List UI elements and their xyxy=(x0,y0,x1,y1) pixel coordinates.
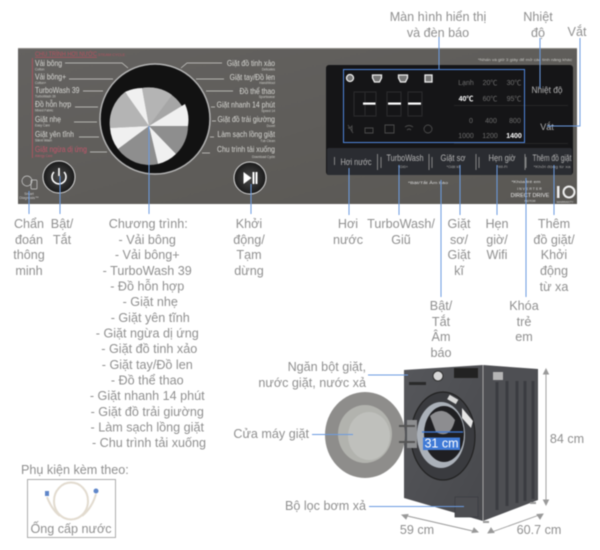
button row xyxy=(334,153,572,170)
label: smart diagnosis: minh xyxy=(15,264,43,278)
label: sound toggle: Âm xyxy=(432,329,450,344)
dimension: depth: 60.7 cm xyxy=(517,523,561,537)
open door xyxy=(325,392,405,478)
label: program list: - Giặt tay/Đồ len xyxy=(102,358,193,372)
label: sound toggle: Tắt xyxy=(432,314,451,329)
label: power: Tắt xyxy=(53,232,72,247)
drum opening xyxy=(411,392,475,480)
program list right: Hand/Wool xyxy=(259,81,275,85)
temperature label: Nhiệt độ xyxy=(532,85,562,95)
spin options: 1000 xyxy=(458,133,474,140)
label: start pause: dừng xyxy=(234,264,264,278)
washing machine xyxy=(325,365,538,522)
program list left: Easy Care xyxy=(35,123,50,128)
callout: door xyxy=(233,427,353,441)
label: start pause: động/ xyxy=(233,233,265,247)
button row: *Wi-Fi xyxy=(497,164,508,169)
button row: Hẹn giờ xyxy=(488,153,516,163)
label: smart diagnosis: thông xyxy=(13,248,45,262)
icons row top xyxy=(346,74,432,82)
label: sound toggle: báo xyxy=(430,346,452,360)
button row: *Giặt kĩ xyxy=(446,164,460,169)
dimension: width xyxy=(400,514,478,537)
program list left: TurboWash 39 xyxy=(35,94,56,99)
callout: detergent drawer: Ngăn bột giặt, xyxy=(288,360,366,374)
program list left: STEAM CYCLE xyxy=(98,53,126,57)
icon: start pause button xyxy=(234,162,266,194)
label: program list: - Giặt yên tĩnh xyxy=(111,311,190,325)
label: add garment: Thêm xyxy=(538,217,570,231)
temperature options: 20℃ xyxy=(483,79,497,87)
label: program list: - Giặt đồ trải giường xyxy=(91,405,204,419)
label: steam: Hơi xyxy=(338,217,358,231)
label: program list: - Giặt ngừa dị ứng xyxy=(96,326,199,340)
label: child lock: Khóa xyxy=(509,299,539,313)
dimension: height xyxy=(544,369,584,505)
front of machine xyxy=(404,365,483,521)
inverter direct drive badge xyxy=(511,187,550,203)
spin options: 1200 xyxy=(482,133,498,140)
label: child lock: em xyxy=(515,330,533,344)
label: program list: - Đồ hỗn hợp xyxy=(110,278,184,294)
button row: *Khởi động từ xa xyxy=(534,164,571,169)
label: timer wifi: giờ/ xyxy=(486,233,508,247)
spin options: 0 xyxy=(469,118,473,125)
callout lines panel xyxy=(29,37,580,297)
label: program list: - Giặt đồ tinh xảo xyxy=(101,342,197,356)
label: sound toggle: Bật/ xyxy=(430,299,453,313)
label: start pause: Khởi xyxy=(236,217,262,231)
program list right: Giặt đồ tinh xảo xyxy=(227,58,275,68)
child lock note: *Khóa trẻ em xyxy=(512,179,541,184)
control panel xyxy=(18,48,577,204)
spin options: 400 xyxy=(485,118,497,125)
program list left: Cotton xyxy=(35,67,44,72)
program list right xyxy=(181,58,276,159)
program list left: CHU TRÌNH HƠI NƯỚC xyxy=(35,49,97,58)
spin label: Vắt xyxy=(540,122,554,132)
side of machine xyxy=(483,365,538,521)
temperature options: 95℃ xyxy=(507,95,521,103)
program list right: Speed 14 xyxy=(261,109,275,113)
program list left: Giặt yên tĩnh xyxy=(35,129,74,139)
program list right: Duvet xyxy=(267,124,275,128)
label: program list: Chương trình: xyxy=(109,217,188,231)
label: add garment: Khởi xyxy=(541,248,567,262)
dimension: height: 84 cm xyxy=(550,432,584,446)
program list right: Làm sạch lồng giặt xyxy=(217,129,276,139)
temperature options: 30℃ xyxy=(507,79,521,87)
label: power: Bật/ xyxy=(51,217,74,231)
label: program list: - Vải bông xyxy=(119,233,176,247)
program list left: Cotton+ xyxy=(35,81,46,85)
program list left xyxy=(32,49,128,158)
temperature options xyxy=(458,79,521,103)
control strip xyxy=(409,368,478,385)
label: program list: - Đồ thể thao xyxy=(111,374,184,388)
label: timer wifi: Wifi xyxy=(487,248,507,262)
heading: display and indicators: Màn hình hiển thị xyxy=(390,10,486,24)
program list left: TurboWash 39 xyxy=(35,85,79,95)
button row: Thêm đồ giặt xyxy=(532,153,572,163)
label: prewash: sơ/ xyxy=(450,233,469,247)
label: smart diagnosis: Chẩn xyxy=(14,217,44,231)
icon: power button xyxy=(43,161,75,193)
program list right: Giặt đồ trải giường xyxy=(217,114,275,124)
program list right: Giặt tay/Đồ len xyxy=(230,72,275,82)
heading: display and indicators: và đèn báo xyxy=(407,26,469,40)
label: prewash: Giặt xyxy=(447,248,471,262)
callout: pump filter: Bộ lọc bơm xả xyxy=(285,499,366,513)
program list right: Delicates xyxy=(262,67,275,72)
10 year warranty badge: WARRANTY xyxy=(556,200,574,204)
sound toggle note: *Bật/Tắt Âm báo xyxy=(408,180,449,185)
temperature options: 40℃ xyxy=(459,95,473,103)
program list left: Vải bông+ xyxy=(35,72,67,82)
display highlight frame xyxy=(344,70,524,142)
label: add garment: động xyxy=(540,264,568,278)
label: add garment: đồ giặt/ xyxy=(533,233,575,247)
program list left: Đồ hỗn hợp xyxy=(35,99,71,109)
label: turbowash: Giũ xyxy=(391,233,411,247)
icon: smart diagnosis: Smart xyxy=(24,192,34,196)
inverter direct drive badge: DIRECT DRIVE xyxy=(511,193,550,199)
button row: *Giũ+ xyxy=(398,164,409,169)
spin options xyxy=(458,118,522,140)
filter cover xyxy=(455,497,478,517)
program list right: Chu trình tải xuống xyxy=(217,144,275,154)
display panel xyxy=(326,58,573,175)
dimension: drum diameter: 31 cm xyxy=(424,436,459,450)
label: program list: - Chu trình tải xuống xyxy=(92,436,206,450)
seven segment readout xyxy=(354,92,422,116)
label: program list: - Giặt nhanh 14 phút xyxy=(90,389,205,403)
accessories box: water hose xyxy=(28,480,116,538)
callout: door: Cửa máy giặt xyxy=(233,427,310,441)
dimension: depth xyxy=(488,514,561,537)
program list right: Sportswear xyxy=(259,95,276,99)
callout: detergent drawer xyxy=(258,360,408,390)
status icons xyxy=(348,125,432,133)
callout: detergent drawer: nước giặt, nước xả xyxy=(258,376,366,390)
inverter direct drive badge: INVERTER xyxy=(517,187,543,191)
label: prewash: kĩ xyxy=(454,264,464,278)
dimension: width: 59 cm xyxy=(400,523,434,537)
icon: program dial xyxy=(100,64,210,174)
label: add garment: từ xa xyxy=(540,280,568,294)
temperature options: Lạnh xyxy=(458,80,474,87)
label: smart diagnosis: đoán xyxy=(15,233,43,247)
accessories heading: Phụ kiện kèm theo: xyxy=(21,463,129,477)
program list left: Silent Wash xyxy=(35,138,52,143)
display panel: *Nhấn và giữ 3 giây để mở các tính năng khác xyxy=(478,58,572,62)
icon: smart diagnosis xyxy=(19,176,39,200)
program list left: Mixed Fabric xyxy=(35,108,53,113)
10 year warranty badge xyxy=(556,186,574,204)
label: start pause: Tạm xyxy=(236,248,262,262)
button row: Giặt sơ xyxy=(440,153,466,163)
button row: Hơi nước xyxy=(340,157,372,167)
spin options: 1400 xyxy=(506,133,522,140)
program list left: Giặt nhẹ xyxy=(35,114,61,124)
door hinge xyxy=(407,420,417,448)
program list left: Vải bông xyxy=(35,58,62,68)
label: steam: nước xyxy=(333,233,363,247)
program list right: Tub Clean xyxy=(260,139,275,143)
heading: spin: Vắt xyxy=(568,24,587,39)
heading: temperature: độ xyxy=(531,26,545,40)
label: program list: - Làm sạch lồng giặt xyxy=(91,420,204,434)
label: program list: - Giặt nhẹ xyxy=(123,295,178,309)
program list right: Download Cycle xyxy=(252,155,275,159)
spin options: 800 xyxy=(509,118,521,125)
label: prewash: Giặt xyxy=(447,217,471,231)
heading: temperature: Nhiệt xyxy=(523,10,553,24)
label: turbowash: TurboWash/ xyxy=(367,217,435,231)
program list right: Giặt nhanh 14 phút xyxy=(217,100,276,110)
temperature options: 60℃ xyxy=(483,95,497,103)
accessories box: water hose: Ống cấp nước xyxy=(30,521,112,536)
button row: TurboWash xyxy=(386,153,424,163)
label: child lock: trẻ xyxy=(517,315,531,329)
dimension: drum diameter xyxy=(422,432,463,450)
label: program list: - TurboWash 39 xyxy=(103,264,192,278)
label: timer wifi: Hẹn xyxy=(485,217,509,231)
program list left: Giặt ngừa dị ứng xyxy=(35,144,87,154)
program list left: Allergy Care xyxy=(35,154,53,158)
feet xyxy=(483,503,536,522)
icon: smart diagnosis: Diagnosis™ xyxy=(19,196,39,200)
program list right: Đồ thể thao xyxy=(240,86,275,96)
inverter direct drive badge: MOTOR xyxy=(524,199,536,203)
label: program list: - Vải bông+ xyxy=(115,248,180,262)
